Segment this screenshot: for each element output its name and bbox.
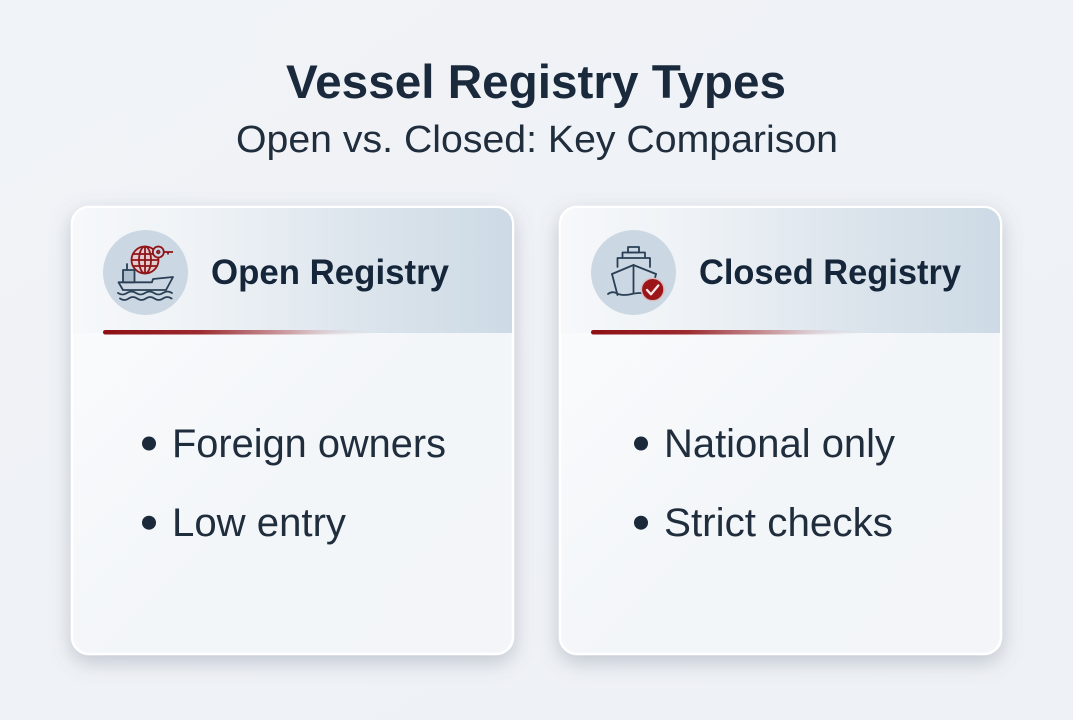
accent rule [591,330,863,334]
bullet list [634,422,895,545]
icon: ship with check badge [591,230,676,315]
bullet list: Foreign owners [172,422,446,466]
bullet list [142,422,446,545]
header band [561,208,1000,333]
card background [560,207,1001,654]
card background [72,207,513,654]
panel: open registry [72,207,513,654]
bullet list: Strict checks [664,501,893,545]
bullet list: Low entry [172,501,346,545]
title: Vessel Registry Types [286,55,786,108]
subtitle: Open vs. Closed: Key Comparison [236,119,838,161]
panel: closed registry [560,207,1001,654]
heading: closed registry: Closed Registry [699,253,962,292]
header band [73,208,512,333]
bullet list: National only [664,422,895,466]
accent rule [103,330,375,334]
icon: ship with globe and key [103,230,188,315]
heading: open registry: Open Registry [211,253,450,292]
